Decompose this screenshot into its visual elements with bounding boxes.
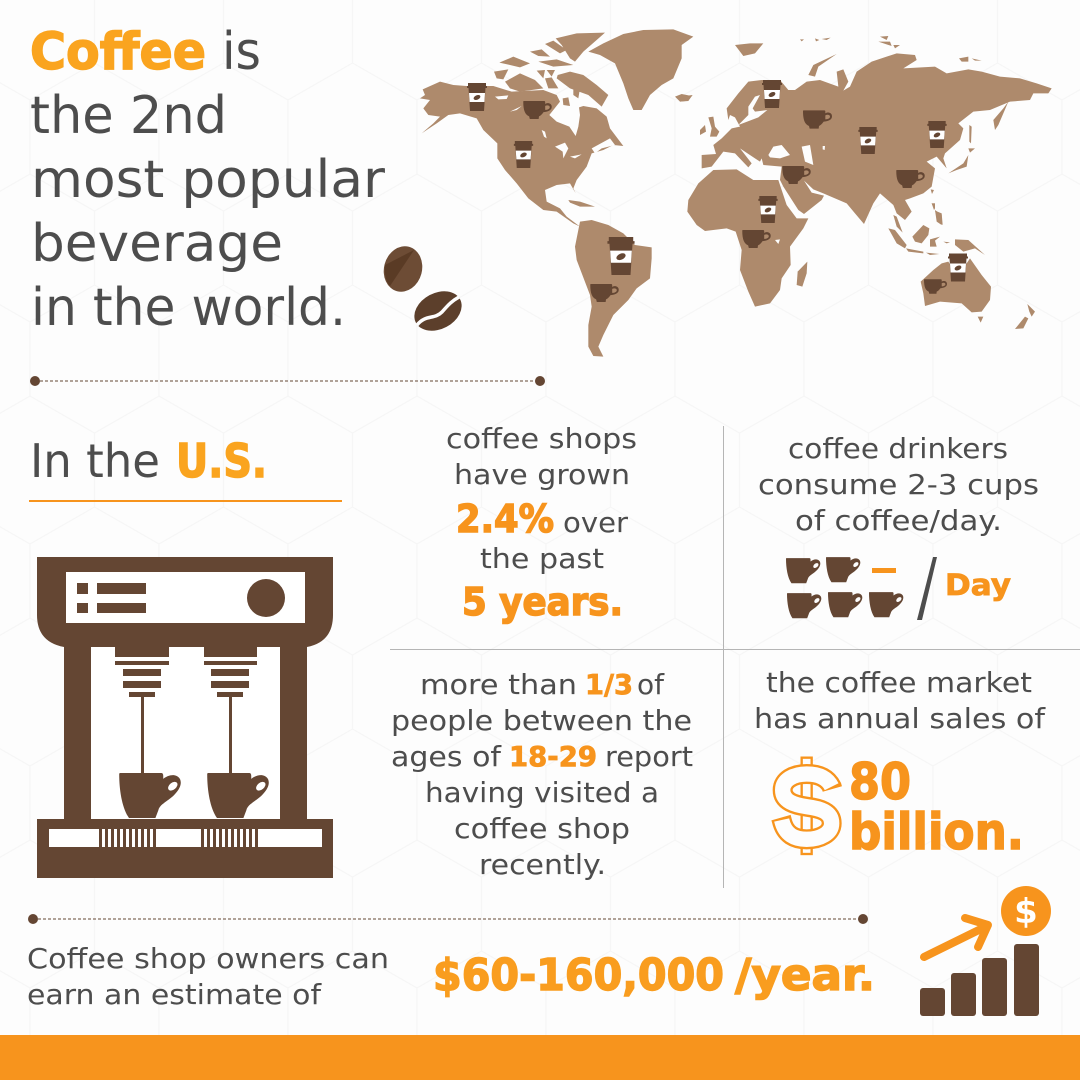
grid dividers xyxy=(390,426,1080,888)
bean two xyxy=(407,283,469,339)
divider bottom xyxy=(28,914,868,924)
owner earnings text: Coffee shop owners can xyxy=(27,942,389,975)
panel: ages 18-29 xyxy=(391,668,693,881)
title: most popular xyxy=(31,150,386,210)
panel: annual sales: has annual sales of xyxy=(754,702,1046,735)
panel: coffee shops growth: have grown xyxy=(454,458,630,491)
panel: ages 18-29: recently. xyxy=(479,848,606,881)
earnings figure: /year. xyxy=(735,950,875,1001)
southeast asia, australia xyxy=(888,203,1035,329)
panel: cups per day: consume 2-3 cups xyxy=(758,468,1039,501)
eurasia xyxy=(680,36,1052,224)
sales figure: billion. xyxy=(849,803,1024,861)
icon: growth chart xyxy=(920,886,1051,1016)
panel: cups per day: coffee drinkers xyxy=(788,432,1008,465)
panel: ages 18-29: people between the xyxy=(391,704,692,737)
panel: ages 18-29: ages of xyxy=(391,740,502,773)
title: beverage xyxy=(31,214,283,274)
heading: In the U.S.: U.S. xyxy=(176,434,267,488)
panel: coffee shops growth: 5 years. xyxy=(462,580,623,624)
icon: mugs xyxy=(523,101,947,302)
panel: coffee shops growth: coffee shops xyxy=(446,422,637,455)
south america, africa xyxy=(575,169,808,357)
panel: annual sales xyxy=(754,666,1046,861)
bean one xyxy=(379,242,427,296)
day label: Day xyxy=(945,568,1011,602)
panel: ages 18-29: coffee shop xyxy=(454,812,630,845)
panel: ages 18-29: having visited a xyxy=(425,776,659,809)
panel: ages 18-29: of xyxy=(637,668,665,701)
footer bar xyxy=(0,1035,1080,1080)
heading: In the U.S.: In the xyxy=(30,434,160,488)
earnings figure: $60-160,000 xyxy=(433,950,724,1001)
icon: growth chart: $ xyxy=(1014,892,1038,932)
icon: coffee beans xyxy=(379,242,469,339)
icon: takeaway cups xyxy=(467,80,968,282)
panel: coffee shops growth: over xyxy=(563,506,628,539)
panel: ages 18-29: 1/3 xyxy=(585,668,633,701)
panel: ages 18-29: report xyxy=(605,740,693,773)
panel: cups per day: of coffee/day. xyxy=(795,504,1002,537)
title: in the world. xyxy=(31,278,346,338)
sales figure: 80 xyxy=(849,753,911,811)
owner earnings text xyxy=(27,942,389,1011)
icon: dollar outline xyxy=(781,758,832,854)
panel: ages 18-29: 18-29 xyxy=(509,740,597,773)
americas north xyxy=(420,29,693,227)
panel: coffee shops growth xyxy=(446,422,637,624)
panel: coffee shops growth: the past xyxy=(480,542,604,575)
panel: ages 18-29: more than xyxy=(420,668,577,701)
slash xyxy=(917,557,937,620)
panel: annual sales: the coffee market xyxy=(766,666,1032,699)
title xyxy=(30,22,386,338)
icon: five cups xyxy=(786,557,903,618)
icon: espresso machine xyxy=(37,557,333,878)
east asia islands xyxy=(931,57,1008,225)
title: Coffee xyxy=(30,23,206,82)
owner earnings text: earn an estimate of xyxy=(27,978,322,1011)
title: the 2nd xyxy=(30,86,227,146)
panel: cups per day xyxy=(758,432,1039,620)
world map with coffee cups xyxy=(420,29,1052,357)
title: is xyxy=(222,22,261,82)
sales figure xyxy=(849,753,1024,861)
divider top xyxy=(30,376,545,386)
heading: In the U.S. xyxy=(29,434,342,502)
panel: coffee shops growth: 2.4% xyxy=(456,497,554,541)
